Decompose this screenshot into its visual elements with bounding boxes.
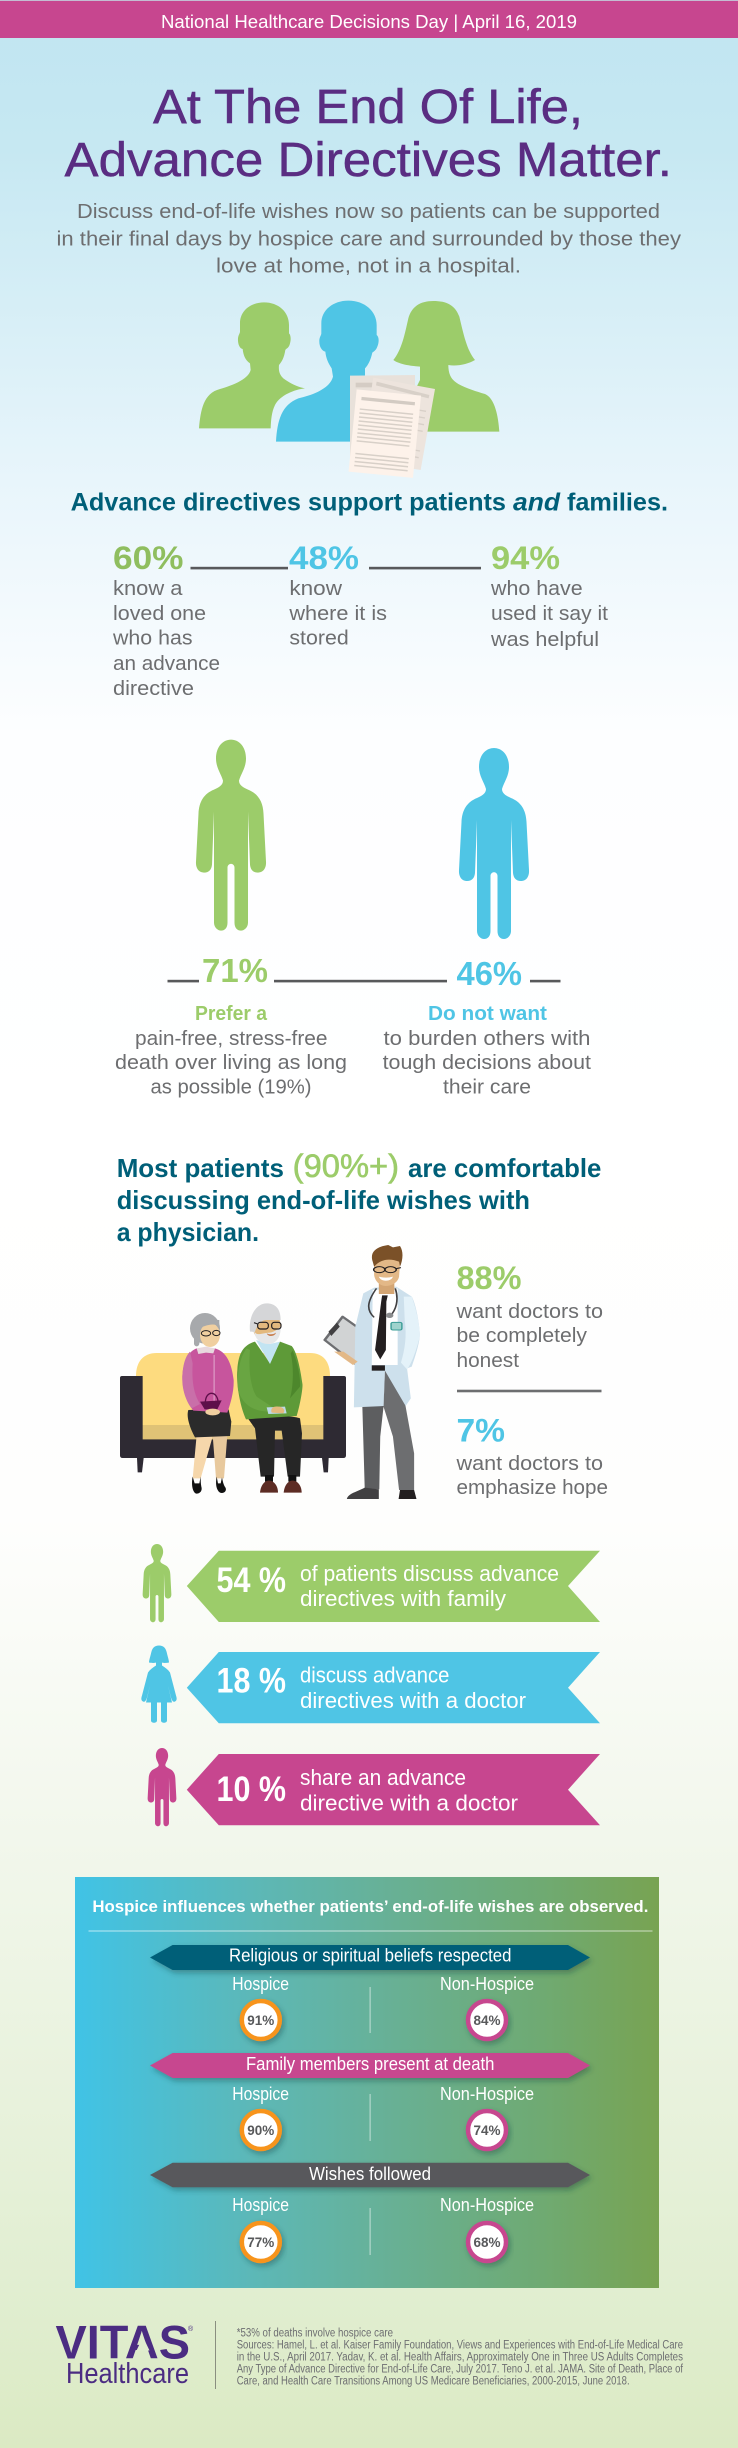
title: Advance Directives Matter. xyxy=(64,134,672,187)
stat: 60 percent: directive xyxy=(113,678,194,700)
stat: 94 percent: who have xyxy=(490,578,583,600)
neck and head xyxy=(379,1280,394,1294)
elderly man xyxy=(237,1303,303,1493)
stat: 48 percent: 48% xyxy=(289,540,359,576)
comparison: wishes followed xyxy=(232,2195,534,2261)
icon: blue person xyxy=(459,748,529,939)
stat: 46 percent do not want: Do not want xyxy=(428,1003,547,1025)
footnotes and sources: Care, and Health Care Transitions Among US Medicare Beneficiaries, 2000-2015, June 2018. xyxy=(237,2376,630,2388)
ribbon: wishes followed xyxy=(150,2163,590,2187)
stat: 60 percent: an advance xyxy=(113,653,220,675)
ribbon: religious or spiritual beliefs xyxy=(150,1945,590,1970)
comparison: family present: Hospice xyxy=(232,2084,289,2104)
badge xyxy=(391,1322,402,1330)
banner: 10 percent: 10 % xyxy=(216,1770,286,1809)
panel heading: Hospice influences whether patients’ end-of-life wishes are observed. xyxy=(92,1897,648,1916)
logo: VITAS Healthcare: Healthcare xyxy=(66,2358,189,2390)
hand xyxy=(334,1352,358,1365)
stat: 46 percent do not want: 46% xyxy=(456,955,522,992)
stat: 88 percent: honest xyxy=(456,1350,519,1372)
elderly woman xyxy=(182,1313,234,1494)
doctor shoes xyxy=(347,1488,379,1499)
shirt xyxy=(372,1288,398,1365)
stat: 71 percent prefer xyxy=(115,952,347,1098)
stat: 71 percent prefer: 71% xyxy=(202,952,268,989)
comparison: family present: 90% xyxy=(247,2122,275,2138)
title xyxy=(64,81,672,187)
banner: 54 percent: directives with family xyxy=(300,1586,506,1611)
stat: 88 percent: be completely xyxy=(456,1325,587,1347)
comparison: beliefs respected xyxy=(232,1974,534,2039)
tie xyxy=(375,1295,388,1359)
intro text: love at home, not in a hospital. xyxy=(216,256,521,278)
stat: 71 percent prefer: pain-free, stress-free xyxy=(135,1028,328,1050)
logo: VITAS Healthcare: ® xyxy=(188,2325,194,2333)
banner: 54 percent: of patients discuss advance xyxy=(300,1561,559,1586)
intro text: Discuss end-of-life wishes now so patients can be supported xyxy=(77,201,660,223)
stat: 94 percent: was helpful xyxy=(490,629,599,651)
comparison: wishes followed: Non-Hospice xyxy=(440,2195,534,2215)
stethoscope xyxy=(369,1288,397,1317)
banner: 18 percent: directives with a doctor xyxy=(300,1688,526,1713)
comparison: family present: 74% xyxy=(474,2122,501,2138)
stat: 71 percent prefer: Prefer a xyxy=(195,1003,268,1025)
stat: 48 percent: stored xyxy=(289,628,349,650)
stat: 94 percent: used it say it xyxy=(491,603,608,625)
heading: most patients comfortable: (90%+) xyxy=(293,1148,399,1184)
heading: most patients comfortable: discussing end-of-life wishes with xyxy=(117,1185,530,1215)
stat: 88 percent: want doctors to xyxy=(455,1301,603,1323)
comparison: beliefs respected: Hospice xyxy=(232,1974,289,1994)
comparison: beliefs respected: Non-Hospice xyxy=(440,1974,534,1994)
heading: most patients comfortable: are comfortable xyxy=(408,1153,601,1183)
footnotes and sources xyxy=(237,2328,684,2388)
banner text: National Healthcare Decisions Day | April 16, 2019 xyxy=(161,12,577,32)
ribbon: wishes followed: Wishes followed xyxy=(309,2164,431,2184)
ribbon: family members present: Family members present at death xyxy=(246,2054,494,2074)
stat: 88 percent xyxy=(455,1260,603,1372)
stat: 7 percent: emphasize hope xyxy=(456,1477,608,1499)
icon: documents xyxy=(349,375,435,478)
illustration: doctor xyxy=(325,1245,420,1499)
white coat xyxy=(354,1287,420,1407)
icon: center person silhouette xyxy=(276,301,379,442)
stat: 46 percent do not want: tough decisions about xyxy=(383,1052,591,1074)
top banner xyxy=(0,0,738,38)
sofa xyxy=(120,1353,346,1472)
footnotes and sources: *53% of deaths involve hospice care xyxy=(237,2328,393,2340)
icon: small green person xyxy=(143,1544,171,1622)
intro text xyxy=(56,201,681,278)
stat: 71 percent prefer: as possible (19%) xyxy=(150,1076,312,1098)
heading: most patients comfortable: Most patients xyxy=(117,1153,284,1183)
title: At The End Of Life, xyxy=(153,81,583,134)
ribbon: family members present xyxy=(150,2053,590,2078)
stat: 60 percent: 60% xyxy=(113,540,184,576)
stat: 60 percent: know a xyxy=(113,578,183,600)
doctor pants xyxy=(362,1370,385,1489)
stat: 60 percent: who has xyxy=(112,628,192,650)
banner: 10 percent: share an advance xyxy=(300,1765,466,1790)
heading: advance directives support: and xyxy=(513,488,561,516)
stat: 88 percent: 88% xyxy=(456,1260,522,1296)
comparison: family present xyxy=(232,2084,534,2149)
clipboard xyxy=(325,1317,362,1365)
icon: small magenta person xyxy=(148,1748,176,1826)
stat: 71 percent prefer: death over living as long xyxy=(115,1052,347,1074)
icon: man silhouette xyxy=(199,302,305,428)
panel: hospice influences xyxy=(75,1877,659,2288)
stat: 48 percent: know xyxy=(289,578,343,600)
icon: woman silhouette xyxy=(393,301,499,432)
stat: 46 percent do not want xyxy=(383,955,591,1098)
banner: 18 percent: discuss advance xyxy=(300,1662,449,1687)
banner: 10 percent xyxy=(187,1754,600,1825)
heading: most patients comfortable xyxy=(117,1148,601,1247)
stat: 46 percent do not want: their care xyxy=(443,1076,531,1098)
stat: 48 percent: where it is xyxy=(288,603,387,625)
comparison: wishes followed: 77% xyxy=(247,2234,275,2250)
comparison: family present: Non-Hospice xyxy=(440,2084,534,2104)
intro text: in their final days by hospice care and surrounded by those they xyxy=(56,228,681,250)
comparison: wishes followed: Hospice xyxy=(232,2195,289,2215)
logo: VITAS Healthcare xyxy=(56,2316,194,2390)
stat: 48 percent xyxy=(288,540,387,650)
heading: advance directives support: families. xyxy=(567,488,668,516)
icon: three people with documents xyxy=(199,301,499,478)
comparison: wishes followed: 68% xyxy=(474,2234,501,2250)
stat: 7 percent: 7% xyxy=(456,1412,505,1448)
stat: 46 percent do not want: to burden others with xyxy=(384,1028,590,1050)
stat: 7 percent xyxy=(455,1412,608,1499)
illustration: sofa and seated couple xyxy=(120,1303,346,1494)
banner: 54 percent: 54 % xyxy=(216,1561,286,1600)
comparison: beliefs respected: 91% xyxy=(247,2012,275,2028)
stat: 94 percent xyxy=(490,540,608,651)
banner: 54 percent xyxy=(187,1551,600,1622)
stat: 7 percent: want doctors to xyxy=(455,1453,603,1475)
ribbon: religious or spiritual beliefs: Religious or spiritual beliefs respected xyxy=(229,1946,511,1966)
icon: small blue woman xyxy=(141,1646,177,1723)
stat: 60 percent xyxy=(112,540,220,700)
stat: 60 percent: loved one xyxy=(113,603,206,625)
icon: green person xyxy=(196,740,266,931)
stat: 94 percent: 94% xyxy=(491,540,560,576)
heading: most patients comfortable: a physician. xyxy=(117,1217,259,1247)
banner: 18 percent xyxy=(187,1652,600,1723)
heading: advance directives support: Advance directives support patients xyxy=(71,488,506,516)
stat row divider lines xyxy=(168,980,560,982)
banner: 18 percent: 18 % xyxy=(216,1662,286,1701)
comparison: beliefs respected: 84% xyxy=(474,2012,501,2028)
logo: VITAS Healthcare: VITAS xyxy=(56,2316,190,2369)
banner: 10 percent: directive with a doctor xyxy=(300,1791,518,1816)
